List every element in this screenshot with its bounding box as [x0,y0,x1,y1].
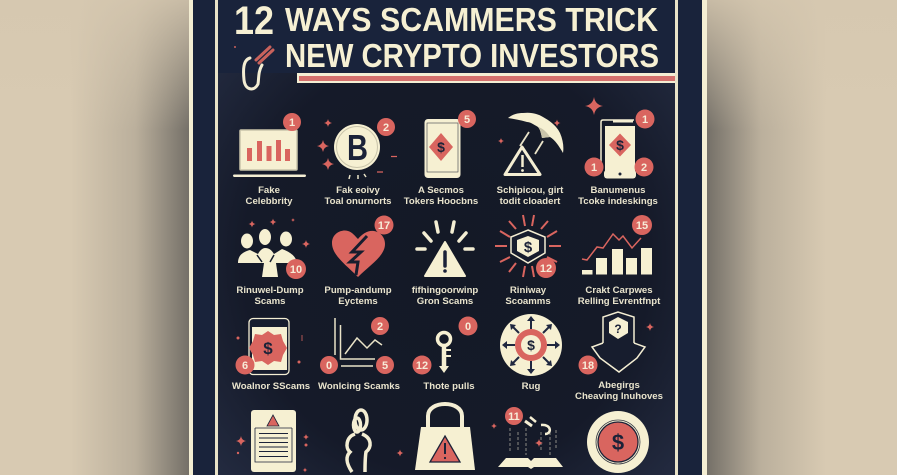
icon: hooded figure: ? [614,322,622,336]
item: phone with three badges [578,97,658,207]
label: Banumenus [591,185,645,196]
item: key [412,316,478,392]
label: Schipicou, girt [497,185,564,196]
label: Tokers Hoocbns [404,196,478,207]
label [236,285,304,307]
item: rug [500,314,562,392]
badge 11: 11 [508,411,520,423]
label [578,185,658,207]
label: Wonlcing Scamks [318,381,400,392]
icon: heart with bolt [332,230,385,277]
icon: chain [347,410,404,472]
item: warning triangle [412,222,478,307]
label: Scoamms [505,296,551,307]
icon: laptop chart [233,130,306,177]
label: Woalnor SScams [232,381,310,392]
poster frame [189,0,707,475]
label [404,185,478,207]
badges: 5 [382,360,388,372]
title: WAYS SCAMMERS TRICK [285,1,658,38]
badges: 1 [591,162,597,174]
label: Thote pulls [423,381,475,392]
icon: phone with red badge: $ [263,339,273,358]
label: Abegirgs [598,380,640,391]
title: 12 [234,0,274,43]
label: Rinuwel-Dump [236,285,304,296]
icon: three people [238,218,310,277]
icon: key [438,332,451,373]
label [575,380,663,402]
label: Pump-andump [324,285,392,296]
label: Cheaving Inuhoves [575,391,663,402]
title underline bar [297,73,675,83]
item: fake celebrity laptop [233,113,306,207]
icon: dollar coin: $ [612,430,624,455]
badges [320,317,394,374]
line chart [335,318,382,366]
badge 12: 12 [540,263,552,275]
label [505,285,551,307]
item: bitcoin coin [317,118,397,207]
icon: dollar coin [587,411,649,473]
item: people group [236,218,310,307]
icon: warning with rays [417,222,473,276]
badge 6: 6 [242,360,248,372]
label [246,185,293,207]
label: Tcoke indeskings [578,196,658,207]
icon: broken chain by title [234,46,273,89]
icon: book with falling chain [491,407,563,469]
icon: phone: $ [616,137,624,153]
badges [584,110,654,176]
badge 18: 18 [582,360,594,372]
item: runaway shield [495,215,561,307]
label: Crakt Carpwes [585,285,653,296]
icon: rug medallion: $ [527,337,535,353]
item: token phone [404,110,478,207]
badges [412,316,478,374]
label [497,185,564,207]
label: Gron Scams [417,296,473,307]
badges: 0 [465,321,471,333]
icon: notepad [236,410,309,472]
item: line chart [318,317,400,392]
badge 5: 5 [464,114,470,126]
label: Scams [255,296,285,307]
label: Rug [522,381,540,392]
badges: 2 [377,321,383,333]
item: rising chart [578,215,661,307]
label [324,285,392,307]
item: hooded shield [575,312,663,402]
label: Celebbrity [246,196,293,207]
icon: coin: B [347,127,368,168]
label: fifhingoorwinp [412,285,478,296]
icon: shield with rays: $ [524,239,533,256]
label: A Secmos [418,185,464,196]
label: Fak eoivy [336,185,381,196]
label: Riniway [510,285,547,296]
badges: 2 [641,162,647,174]
label [412,285,478,307]
badge 17: 17 [378,220,390,232]
icon: phone with diamond: $ [437,139,445,155]
icon: umbrella and warning triangle [498,113,563,174]
icon: padlock warning [415,404,475,470]
label: Eyctems [338,296,378,307]
badges: 12 [416,360,428,372]
badges: 0 [326,360,332,372]
bar chart [582,234,652,274]
badge 15: 15 [636,220,648,232]
label [578,285,661,307]
badges: 1 [642,114,648,126]
badge 2: 2 [383,122,389,134]
item: umbrella warning [497,113,564,207]
item: broken heart [324,216,394,307]
title: NEW CRYPTO INVESTORS [285,37,659,74]
badge 10: 10 [290,264,302,276]
title [218,0,675,74]
label: todit cloadert [500,196,561,207]
label: Relling Evrentfnpt [578,296,661,307]
item: wallet phone [232,318,310,392]
label [325,185,391,207]
badge 1: 1 [289,117,295,129]
label: Toal onurnorts [325,196,391,207]
label: Fake [258,185,280,196]
